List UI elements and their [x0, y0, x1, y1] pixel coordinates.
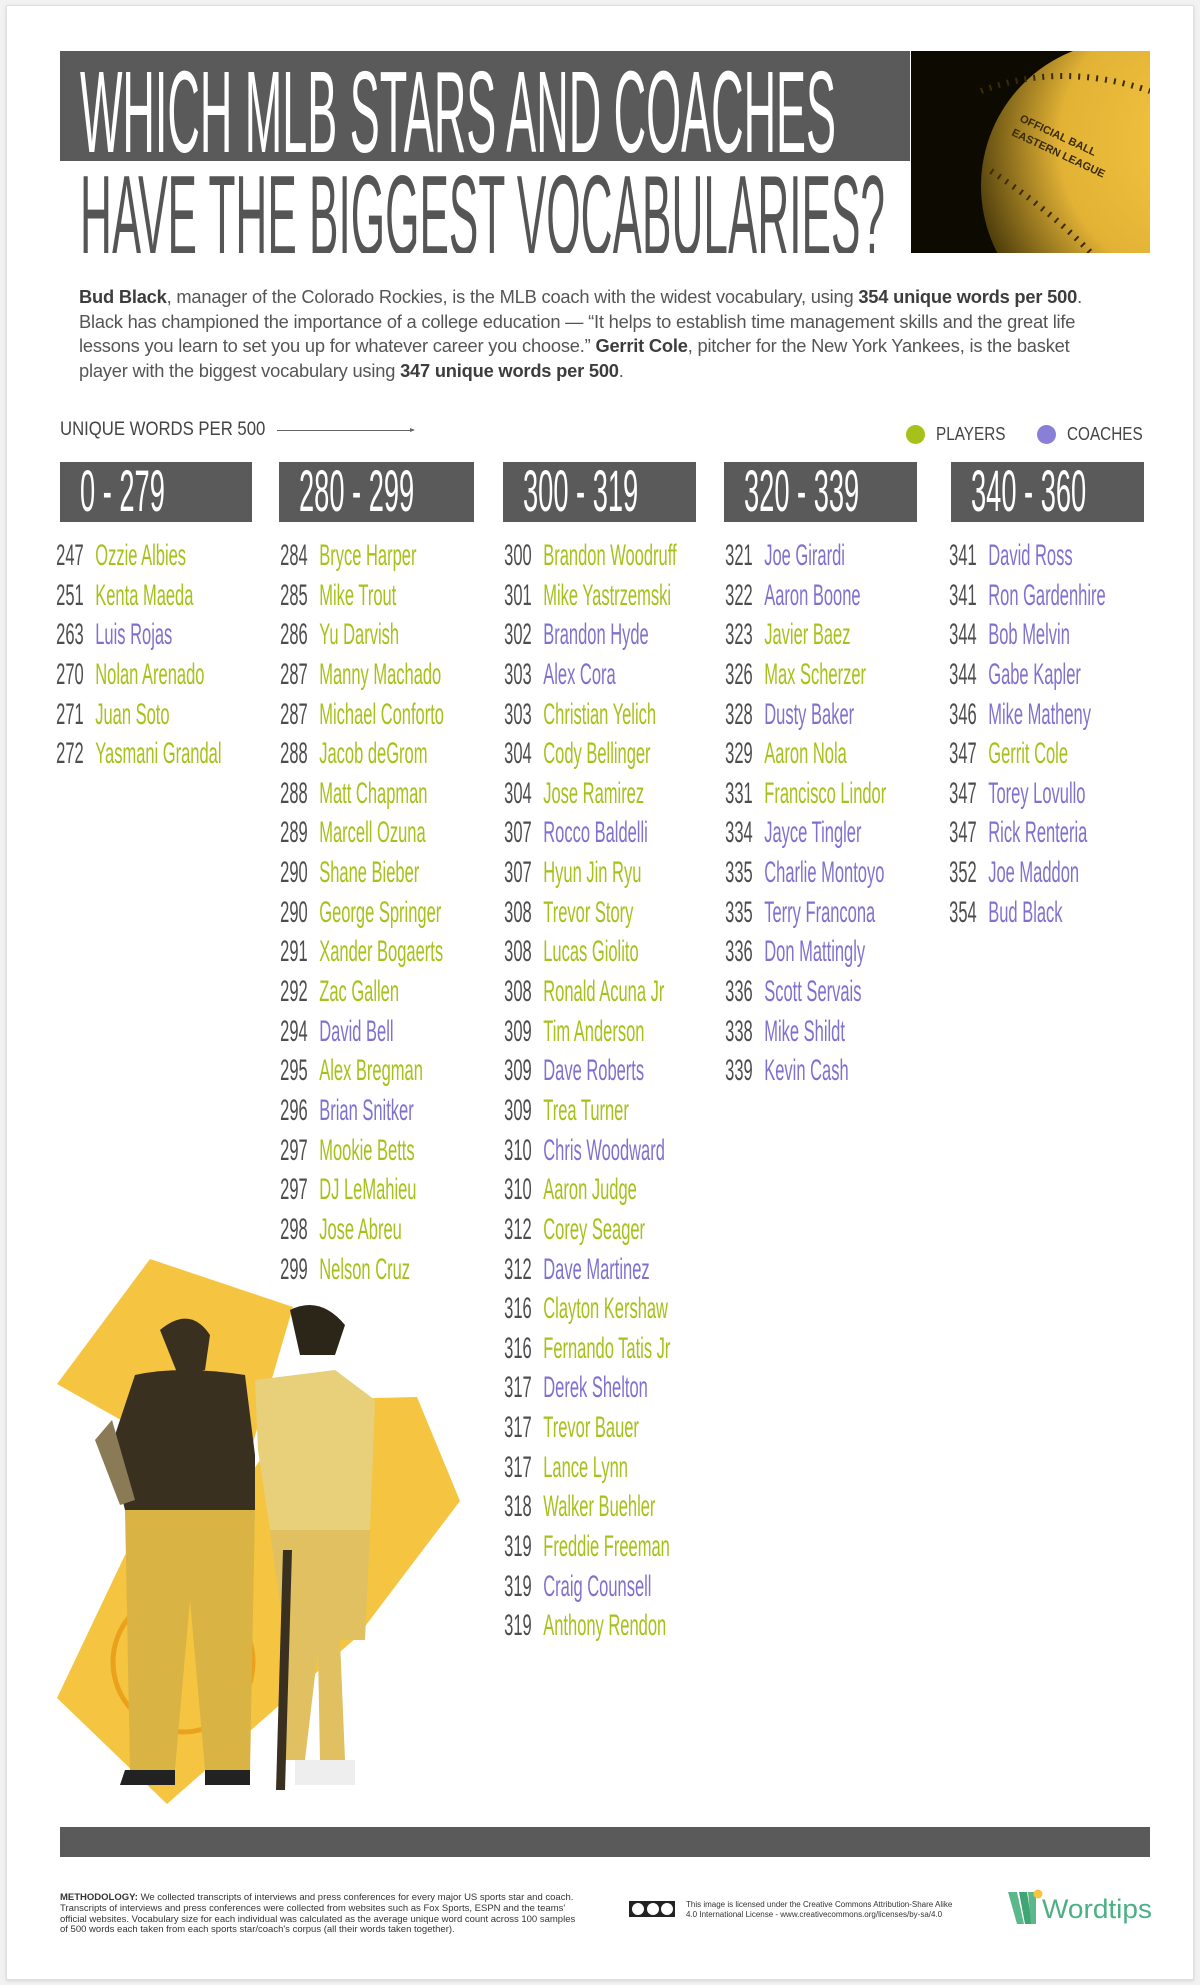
column: 300-319: 318	[504, 1490, 532, 1523]
column: 300-319: Lance Lynn	[543, 1451, 628, 1484]
column: 300-319: Alex Cora	[543, 658, 616, 691]
image: baseball: OFFICIAL BALL	[1018, 113, 1098, 159]
column: 340-360: Mike Matheny	[988, 698, 1091, 731]
column: 280-299: Alex Bregman	[319, 1054, 423, 1087]
column: 280-299: Marcell Ozuna	[319, 816, 426, 849]
column: 320-339: Kevin Cash	[764, 1054, 849, 1087]
column: 0-279: Nolan Arenado	[95, 658, 204, 691]
column: 300-319: Christian Yelich	[543, 698, 656, 731]
range header 340-360: 340 - 360	[971, 459, 1086, 524]
column: 300-319: Ronald Acuna Jr	[543, 975, 664, 1008]
column: 280-299: 299	[280, 1253, 308, 1286]
column: 280-299: Shane Bieber	[319, 856, 419, 889]
column: 300-319: Clayton Kershaw	[543, 1292, 668, 1325]
column: 340-360: Bud Black	[988, 896, 1063, 929]
column: 320-339: 329	[725, 737, 753, 770]
column: 340-360: Bob Melvin	[988, 618, 1070, 651]
legend: players: PLAYERS	[936, 424, 1005, 444]
column: 340-360: Torey Lovullo	[988, 777, 1085, 810]
column: 340-360: Joe Maddon	[988, 856, 1079, 889]
column: 0-279: 270	[56, 658, 84, 691]
column: 280-299: Mookie Betts	[319, 1134, 415, 1167]
column: 280-299: 286	[280, 618, 308, 651]
column: 300-319: 307	[504, 816, 532, 849]
column: 340-360: 344	[949, 618, 977, 651]
column: 300-319: 301	[504, 579, 532, 612]
range header 280-299: 280 - 299	[299, 459, 414, 524]
column: 300-319: Trea Turner	[543, 1094, 629, 1127]
column: 280-299: Brian Snitker	[319, 1094, 414, 1127]
column: 320-339: 328	[725, 698, 753, 731]
column: 320-339: 334	[725, 816, 753, 849]
column: 300-319: Corey Seager	[543, 1213, 645, 1246]
column: 300-319: 317	[504, 1371, 532, 1404]
column: 280-299: 298	[280, 1213, 308, 1246]
column: 300-319: Chris Woodward	[543, 1134, 665, 1167]
column: 280-299: 284	[280, 539, 308, 572]
column: 320-339: Jayce Tingler	[764, 816, 861, 849]
column: 300-319: 309	[504, 1015, 532, 1048]
column: 320-339: 338	[725, 1015, 753, 1048]
column: 300-319: 309	[504, 1054, 532, 1087]
column: 340-360	[949, 539, 1106, 929]
range header 320-339: 320 - 339	[744, 459, 859, 524]
column: 280-299: Manny Machado	[319, 658, 441, 691]
axis label: UNIQUE WORDS PER 500	[60, 419, 265, 440]
column: 0-279: 247	[56, 539, 84, 572]
column: 280-299: 291	[280, 935, 308, 968]
column: 0-279: 263	[56, 618, 84, 651]
column: 280-299: 297	[280, 1173, 308, 1206]
range header 320-339	[724, 462, 917, 522]
column: 300-319: 316	[504, 1332, 532, 1365]
column: 320-339: Don Mattingly	[764, 935, 865, 968]
column: 300-319: 303	[504, 658, 532, 691]
column: 320-339: 335	[725, 856, 753, 889]
column: 340-360: Gerrit Cole	[988, 737, 1068, 770]
column: 300-319: Walker Buehler	[543, 1490, 655, 1523]
column: 300-319: Fernando Tatis Jr	[543, 1332, 670, 1365]
column: 300-319: Derek Shelton	[543, 1371, 648, 1404]
column: 320-339: 323	[725, 618, 753, 651]
column: 340-360: 347	[949, 737, 977, 770]
intro text: Bud Black, manager of the Colorado Rockies, is the MLB coach with the widest vocabulary, using 354 unique words per 500. Black has championed the importance of a college education — “It helps to establish time management skills and the great life lessons you learn to set you up for whatever career you choose.” Gerrit Cole, pitcher for the New York Yankees, is the basket player with the biggest vocabulary using 347 unique words per 500.	[79, 286, 1082, 380]
column: 280-299: 290	[280, 856, 308, 889]
column: 300-319: Aaron Judge	[543, 1173, 637, 1206]
column: 300-319: 310	[504, 1173, 532, 1206]
column: 300-319: 304	[504, 777, 532, 810]
column: 300-319: 308	[504, 896, 532, 929]
column: 280-299: 295	[280, 1054, 308, 1087]
column: 0-279: Yasmani Grandal	[95, 737, 222, 770]
column: 300-319: 303	[504, 698, 532, 731]
column: 320-339: Aaron Nola	[764, 737, 847, 770]
range header 300-319: 300 - 319	[523, 459, 638, 524]
column: 340-360: David Ross	[988, 539, 1073, 572]
column: 320-339: Francisco Lindor	[764, 777, 886, 810]
column: 300-319: 319	[504, 1609, 532, 1642]
column: 280-299: DJ LeMahieu	[319, 1173, 416, 1206]
column: 320-339: 336	[725, 935, 753, 968]
column: 300-319: 312	[504, 1213, 532, 1246]
range header 340-360	[951, 462, 1144, 522]
image: baseball: EASTERN LEAGUE	[1010, 127, 1107, 181]
column: 300-319: 319	[504, 1530, 532, 1563]
column: 340-360: Gabe Kapler	[988, 658, 1081, 691]
column: 280-299: Bryce Harper	[319, 539, 416, 572]
column: 340-360: 354	[949, 896, 977, 929]
column: 280-299: 285	[280, 579, 308, 612]
column: 300-319: Rocco Baldelli	[543, 816, 648, 849]
range header 300-319	[503, 462, 696, 522]
column: 280-299: George Springer	[319, 896, 441, 929]
column: 300-319: 319	[504, 1570, 532, 1603]
footer bar	[60, 1827, 1150, 1857]
column: 280-299: Xander Bogaerts	[319, 935, 443, 968]
column: 300-319: Brandon Woodruff	[543, 539, 677, 572]
column: 0-279: Juan Soto	[95, 698, 170, 731]
column: 300-319: Trevor Bauer	[543, 1411, 639, 1444]
column: 320-339: 321	[725, 539, 753, 572]
column: 320-339: Dusty Baker	[764, 698, 854, 731]
column: 280-299: 288	[280, 737, 308, 770]
column: 300-319: Hyun Jin Ryu	[543, 856, 641, 889]
column: 340-360: 352	[949, 856, 977, 889]
column: 0-279: Luis Rojas	[95, 618, 172, 651]
logo: Wordtips: Wordtips	[1042, 1894, 1152, 1924]
column: 280-299: Zac Gallen	[319, 975, 399, 1008]
column: 280-299: 297	[280, 1134, 308, 1167]
column: 320-339: Aaron Boone	[764, 579, 861, 612]
column: 0-279: 251	[56, 579, 84, 612]
column: 320-339: Scott Servais	[764, 975, 861, 1008]
column: 280-299: 287	[280, 658, 308, 691]
column: 280-299: 288	[280, 777, 308, 810]
column: 300-319: 317	[504, 1411, 532, 1444]
column: 300-319: Jose Ramirez	[543, 777, 644, 810]
range header 0-279	[60, 462, 252, 522]
column: 320-339: 339	[725, 1054, 753, 1087]
column: 300-319: 302	[504, 618, 532, 651]
column: 280-299: 289	[280, 816, 308, 849]
column: 0-279: Ozzie Albies	[95, 539, 186, 572]
column: 300-319: Brandon Hyde	[543, 618, 649, 651]
column: 300-319: 309	[504, 1094, 532, 1127]
column: 300-319: 304	[504, 737, 532, 770]
column: 280-299: Nelson Cruz	[319, 1253, 410, 1286]
column: 340-360: 341	[949, 579, 977, 612]
column: 320-339: Max Scherzer	[764, 658, 866, 691]
coach figure	[95, 1319, 255, 1785]
column: 300-319: 300	[504, 539, 532, 572]
column: 300-319: Cody Bellinger	[543, 737, 651, 770]
license text: This image is licensed under the Creative Commons Attribution-Share Alike 4.0 International License - www.creativecommons.org/licenses/by-sa/4.0	[686, 1900, 952, 1919]
logo: Wordtips	[1008, 1890, 1152, 1924]
column: 300-319: Freddie Freeman	[543, 1530, 670, 1563]
player figure	[255, 1305, 375, 1790]
column: 280-299: 292	[280, 975, 308, 1008]
column: 320-339: Charlie Montoyo	[764, 856, 884, 889]
column: 340-360: 341	[949, 539, 977, 572]
column: 300-319: Tim Anderson	[543, 1015, 644, 1048]
column: 300-319: 310	[504, 1134, 532, 1167]
column: 280-299: 296	[280, 1094, 308, 1127]
column: 280-299: Yu Darvish	[319, 618, 399, 651]
column: 280-299: Jacob deGrom	[319, 737, 427, 770]
column: 320-339: 335	[725, 896, 753, 929]
column: 280-299: David Bell	[319, 1015, 394, 1048]
icon: creative commons	[629, 1901, 675, 1917]
column: 300-319: Mike Yastrzemski	[543, 579, 671, 612]
column: 320-339: Javier Baez	[764, 618, 850, 651]
methodology text: METHODOLOGY: We collected transcripts of interviews and press conferences for every major US sports star and coach. Transcripts of interviews and press conferences were collected from websites such as Fox Sports, ESPN and the teams' official websites. Vocabulary size for each individual was calculated as the average unique word count across 100 samples of 500 words each taken from each sports star/coach's corpus (all their words taken together).	[60, 1892, 575, 1935]
column: 320-339: 331	[725, 777, 753, 810]
column: 340-360: Ron Gardenhire	[988, 579, 1106, 612]
column: 320-339: 326	[725, 658, 753, 691]
column: 300-319: Dave Martinez	[543, 1253, 650, 1286]
column: 320-339: Mike Shildt	[764, 1015, 845, 1048]
column: 0-279: 272	[56, 737, 84, 770]
column: 280-299	[280, 539, 444, 1286]
column: 300-319	[504, 539, 677, 1642]
column: 320-339: 322	[725, 579, 753, 612]
column: 340-360: 344	[949, 658, 977, 691]
column: 0-279	[56, 539, 222, 770]
column: 300-319: 317	[504, 1451, 532, 1484]
column: 300-319: Anthony Rendon	[543, 1609, 666, 1642]
column: 300-319: 308	[504, 975, 532, 1008]
graphic: players illustration	[57, 1259, 460, 1804]
column: 340-360: 346	[949, 698, 977, 731]
column: 300-319: 308	[504, 935, 532, 968]
column: 340-360: Rick Renteria	[988, 816, 1087, 849]
column: 300-319: Craig Counsell	[543, 1570, 651, 1603]
column: 280-299: Mike Trout	[319, 579, 396, 612]
column: 320-339: Joe Girardi	[764, 539, 845, 572]
title	[60, 51, 910, 253]
legend: coaches: COACHES	[1067, 424, 1143, 444]
column: 0-279: 271	[56, 698, 84, 731]
column: 320-339	[725, 539, 886, 1087]
column: 280-299: Michael Conforto	[319, 698, 444, 731]
column: 300-319: Trevor Story	[543, 896, 633, 929]
column: 280-299: Jose Abreu	[319, 1213, 402, 1246]
column: 280-299: 294	[280, 1015, 308, 1048]
column: 0-279: Kenta Maeda	[95, 579, 193, 612]
column: 300-319: Lucas Giolito	[543, 935, 639, 968]
range header 280-299	[279, 462, 474, 522]
column: 340-360: 347	[949, 777, 977, 810]
column: 280-299: Matt Chapman	[319, 777, 427, 810]
column: 300-319: 307	[504, 856, 532, 889]
column: 320-339: 336	[725, 975, 753, 1008]
column: 300-319: 312	[504, 1253, 532, 1286]
column: 340-360: 347	[949, 816, 977, 849]
image: baseball	[911, 51, 1150, 253]
column: 300-319: 316	[504, 1292, 532, 1325]
column: 300-319: Dave Roberts	[543, 1054, 644, 1087]
range header 0-279: 0 - 279	[80, 459, 165, 524]
column: 280-299: 290	[280, 896, 308, 929]
column: 320-339: Terry Francona	[764, 896, 875, 929]
column: 280-299: 287	[280, 698, 308, 731]
legend	[906, 424, 1143, 444]
legend: players	[906, 424, 1005, 444]
